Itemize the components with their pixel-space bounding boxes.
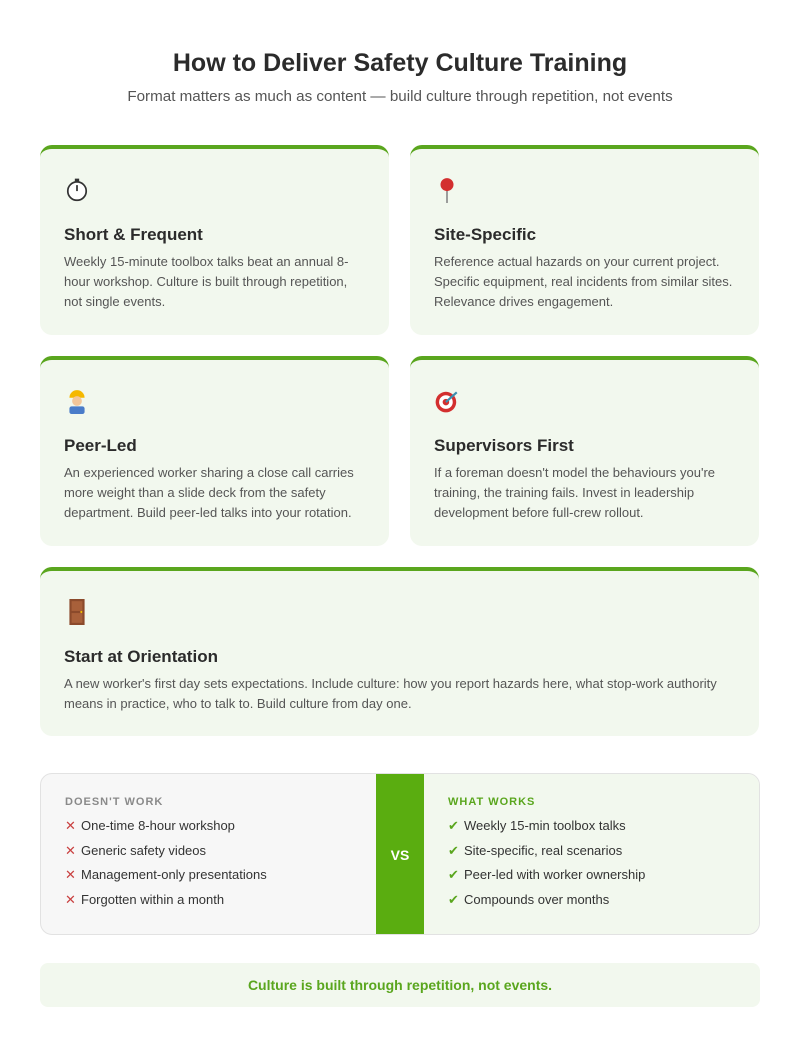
column: what works: Peer-led with worker ownership [464,867,645,882]
panel: site-specific: Specific equipment, real incidents from similar sites. [434,274,732,289]
panel: supervisors first [410,356,759,546]
column: what works: ✔ [448,892,459,906]
panel: peer-led: more weight than a slide deck from the safety [64,485,326,500]
column: doesn't work: Forgotten within a month [81,892,224,906]
panel: peer-led: An experienced worker sharing a close call carries [64,465,354,480]
icon: worker [69,390,85,414]
panel: short & frequent: not single events. [64,294,165,309]
column: doesn't work: Generic safety videos [81,842,206,858]
column: doesn't work: ✕ [65,818,76,833]
column: doesn't work: ✕ [65,842,76,858]
panel: short & frequent: Weekly 15-minute toolbox talks beat an annual 8- [64,254,348,269]
icon: pin [440,178,454,203]
panel: peer-led [40,356,389,546]
column: doesn't work: Management-only presentations [81,867,267,882]
column: doesn't work: ✕ [65,892,76,906]
footer callout [40,963,760,1007]
column: what works: Site-specific, real scenarios [464,842,622,858]
column: doesn't work: One-time 8-hour workshop [81,818,235,833]
panel: site-specific: Site-Specific [434,225,536,244]
panel: site-specific [410,145,759,335]
panel: supervisors first: Supervisors First [434,436,574,455]
icon: door [69,599,85,625]
panel: start at orientation: A new worker's first day sets expectations. Include culture: how you report hazards here, what stop-work authority [64,676,717,691]
title: How to Deliver Safety Culture Training [173,49,627,77]
panel: peer-led: department. Build peer-led talks into your rotation. [64,505,352,520]
column: what works: ✔ [448,867,459,882]
column: what works: Weekly 15-min toolbox talks [464,818,626,833]
panel: short & frequent: hour workshop. Culture is built through repetition, [64,274,347,289]
column: doesn't work: DOESN'T WORK [65,796,163,808]
panel: start at orientation [40,567,759,736]
column: doesn't work [65,796,267,906]
icon: target [436,392,458,412]
panel: short & frequent: Short & Frequent [64,225,203,244]
column: doesn't work: ✕ [65,867,76,882]
panel: supervisors first: development before full-crew rollout. [434,505,644,520]
column: what works: Compounds over months [464,892,609,906]
footer callout: Culture is built through repetition, not events. [248,977,552,993]
vs divider: VS [391,847,409,863]
vs divider [376,774,424,936]
panel: peer-led: Peer-Led [64,436,137,455]
subtitle: Format matters as much as content — build culture through repetition, not events [127,88,673,105]
column: what works: ✔ [448,842,459,858]
panel: site-specific: Reference actual hazards on your current project. [434,254,719,269]
panel: short & frequent [40,145,389,335]
column: what works [424,774,761,936]
panel: site-specific: Relevance drives engagement. [434,294,613,309]
comparison box [40,773,760,935]
panel: supervisors first: If a foreman doesn't model the behaviours you're [434,465,715,480]
panel: start at orientation: Start at Orientation [64,647,218,666]
panel: start at orientation: means in practice, who to talk to. Build culture from day one. [64,696,412,711]
column: what works: WHAT WORKS [448,796,535,808]
column: what works: ✔ [448,818,459,833]
panel: supervisors first: training, the training fails. Invest in leadership [434,485,694,500]
icon: stopwatch [66,178,88,202]
